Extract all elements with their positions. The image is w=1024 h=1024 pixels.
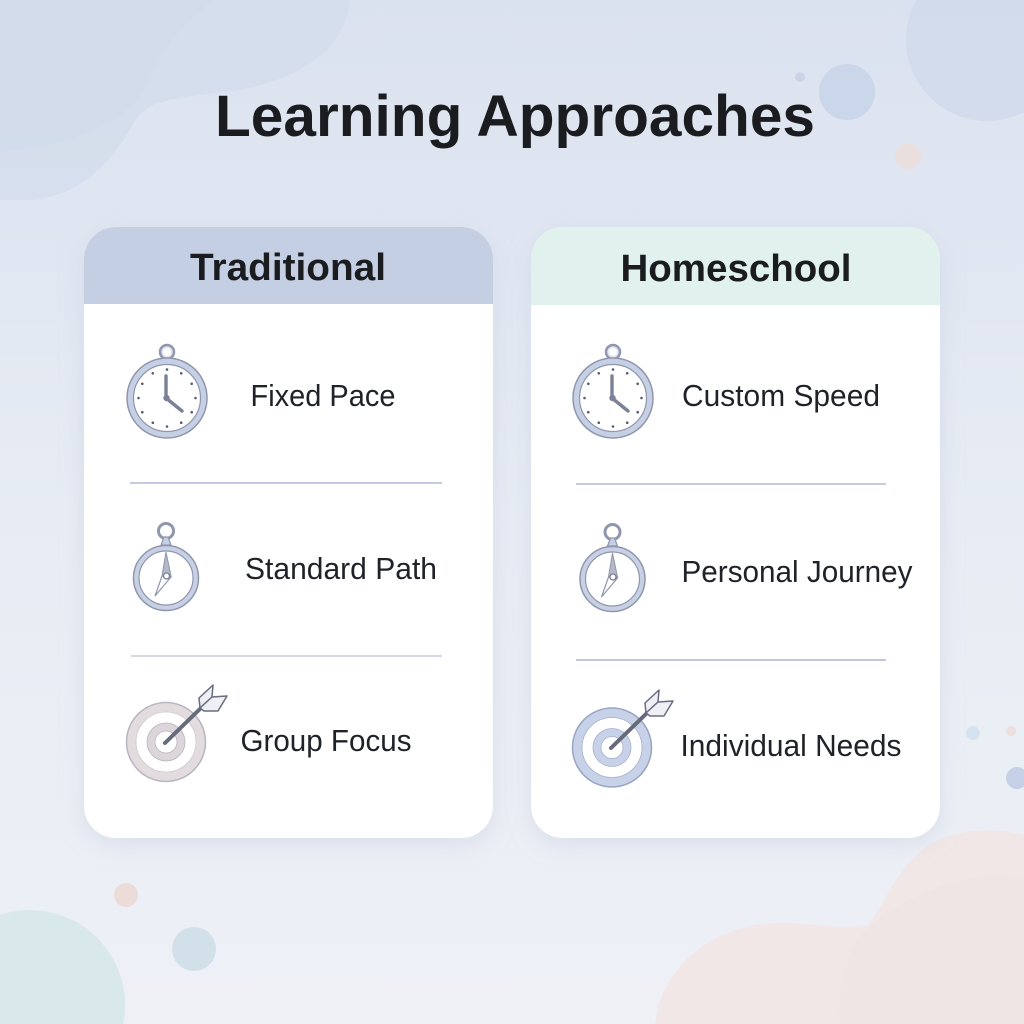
panel: traditional <box>84 227 493 838</box>
label: custom speed: Custom Speed <box>682 378 880 413</box>
title: Learning Approaches <box>215 84 815 149</box>
icon: compass <box>580 524 645 612</box>
panel: homeschool <box>531 227 940 838</box>
header: traditional: Traditional <box>190 247 386 289</box>
label: group focus: Group Focus <box>240 723 412 758</box>
label: individual needs: Individual Needs <box>680 728 902 763</box>
label: standard path: Standard Path <box>245 551 437 586</box>
icon: target <box>572 690 673 787</box>
label: personal journey: Personal Journey <box>682 554 913 589</box>
icon: compass <box>134 524 198 610</box>
icon: clock <box>573 345 653 438</box>
icon: target <box>126 685 227 782</box>
header: homeschool <box>531 227 940 305</box>
header: homeschool: Homeschool <box>620 248 852 290</box>
label: fixed pace: Fixed Pace <box>250 378 396 413</box>
header: traditional <box>84 227 493 304</box>
icon: clock <box>127 345 207 438</box>
